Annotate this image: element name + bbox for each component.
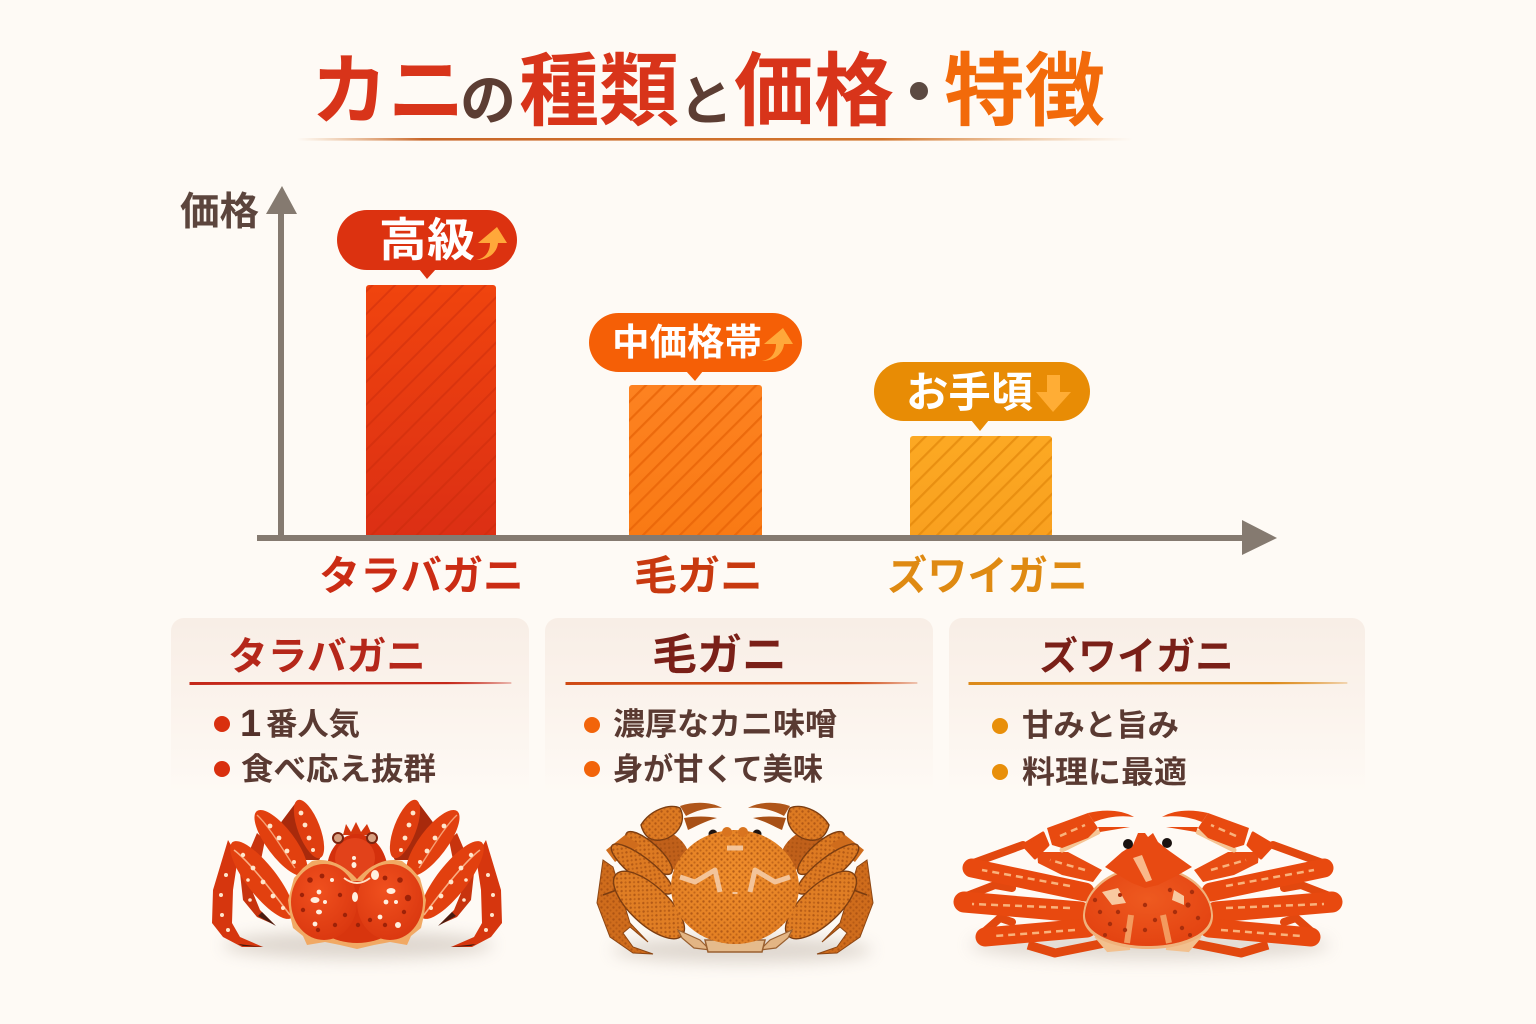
bar: タラバガニ [366,285,496,538]
bullet list: 甘みと旨み [1022,708,1179,743]
title: と [679,72,733,132]
callout: お手頃 [874,362,1090,431]
label: タラバガニ: タラバガニ [319,553,524,599]
panel heading: タラバガニ [228,636,426,679]
arrow: y axis [266,186,297,538]
title [297,47,1133,141]
bullet list: 料理に最適 [1022,755,1187,790]
bullet list: 1 [240,703,261,745]
panel: タラバガニ [171,618,529,959]
bullet list: 番人気 [266,707,360,742]
icon: down arrow [1036,375,1071,412]
icon: up arrow [762,328,793,361]
bullet list: 濃厚なカニ味噌 [613,707,837,742]
title: の [460,69,516,132]
callout: お手頃: お手頃 [906,369,1033,416]
title: 特徴 [944,47,1105,136]
bullet list [584,707,837,787]
bar: 毛ガニ [629,385,762,538]
panel: 毛ガニ [545,618,933,963]
bullet list: 身が甘くて美味 [613,752,823,787]
panel heading: ズワイガニ [1039,636,1234,679]
title: 種類 [519,47,679,136]
y axis label: 価格 [180,191,259,234]
icon: up arrow [476,227,507,260]
callout: 高級: 高級 [379,214,475,266]
callout: 中価格帯 [589,313,802,381]
label: ズワイガニ: ズワイガニ [887,553,1088,599]
bar: ズワイガニ [910,436,1052,538]
arrow: x axis [257,520,1277,555]
bar chart: price [180,186,1277,599]
panel heading: 毛ガニ [652,632,787,680]
bullet list: 食べ応え抜群 [241,752,436,787]
title: 価格 [734,47,894,136]
panel: ズワイガニ [949,618,1365,960]
bullet list [992,708,1187,790]
label: 毛ガニ: 毛ガニ [634,553,763,599]
bullet list [214,703,436,787]
icon: king crab [212,796,502,959]
icon: hair crab [597,803,873,963]
icon: snow crab [964,811,1332,960]
title: カニ [311,47,465,135]
callout: 高級 [337,210,517,279]
callout: 中価格帯: 中価格帯 [612,322,762,363]
